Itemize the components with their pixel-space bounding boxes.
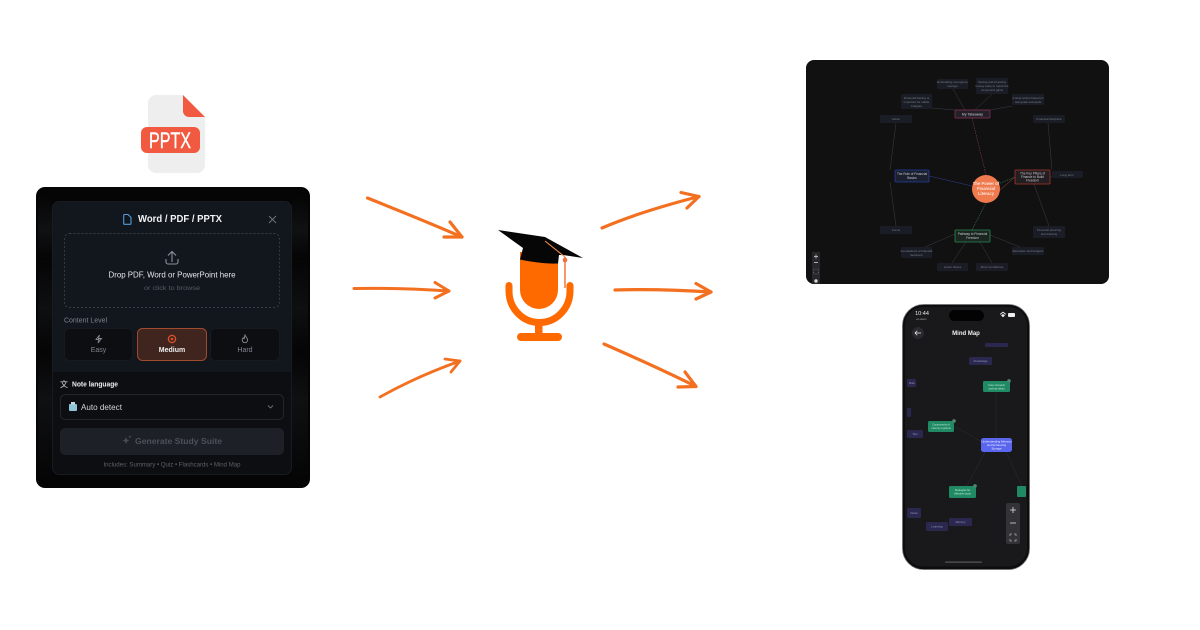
- green node labels: Strategies for: [955, 488, 970, 492]
- purple node labels: Learning: [932, 524, 943, 528]
- node: red branch: Freedom: [1026, 178, 1039, 182]
- outer node labels: [892, 80, 1074, 269]
- icon: document: [124, 214, 131, 224]
- green node labels: memory systems: [931, 426, 951, 430]
- node: green branch: Pathway to Financial: [958, 232, 987, 236]
- node: blue branch: The Role of Financial: [897, 172, 927, 176]
- green node labels: Core concepts: [988, 383, 1006, 387]
- outer node labels: savings: [947, 84, 958, 88]
- status bar: [915, 311, 1015, 321]
- green node badges: [952, 379, 1011, 488]
- outer node labels: Long term: [1060, 173, 1074, 177]
- outer node labels: Focus: [892, 228, 901, 232]
- green node labels: and key ideas: [988, 386, 1005, 390]
- purple node labels: Role: [909, 381, 915, 385]
- outer node labels: A clear action based on: [1012, 96, 1044, 100]
- node: central topic: The Power of: [973, 181, 1000, 186]
- icon: PPTX file: [141, 95, 205, 173]
- outer node labels: budgets: [911, 104, 922, 108]
- panel: drop zone: [64, 234, 280, 308]
- button: generate study suite: Generate Study Suite: [135, 436, 222, 446]
- button: easy: [64, 328, 132, 360]
- node: my takeaway: [955, 110, 990, 118]
- green node labels: Components of: [932, 422, 950, 426]
- node: green branch: Freedom: [966, 236, 979, 240]
- icon: translate: 文: [60, 379, 68, 389]
- node: central topic: Literacy: [978, 191, 995, 196]
- outer nodes: [880, 78, 1083, 271]
- arrow: output bottom: [604, 344, 696, 387]
- green node labels: [931, 383, 1006, 496]
- outer node labels: Saving and investing: [978, 80, 1006, 84]
- arrow: output middle: [615, 284, 711, 299]
- language select: [60, 394, 284, 420]
- purple node labels: Notes: [910, 511, 918, 515]
- outer node labels: Foundations of financial: [901, 249, 933, 253]
- mind map heading: Mind Map: [952, 331, 980, 337]
- icon: PPTX file: PPTX: [149, 128, 191, 153]
- outer node labels: Lower Stress: [944, 265, 962, 269]
- button: easy: Easy: [91, 347, 107, 354]
- icon: upload: [166, 252, 178, 264]
- central blue node: Understanding Memory: [981, 440, 1012, 444]
- back button: [912, 327, 924, 339]
- purple node labels: Tips: [912, 432, 918, 436]
- node: my takeaway: My Takeaway: [962, 112, 983, 116]
- button: medium selected: [138, 328, 206, 360]
- purple node labels: Memory: [955, 520, 966, 524]
- panel: upload dialog: [36, 187, 310, 488]
- home indicator: [945, 562, 982, 563]
- dynamic island: [949, 310, 984, 321]
- browse hint: or click to browse: [144, 285, 200, 292]
- graduation cap: [498, 230, 583, 264]
- outer node labels: Embedding emergency: [937, 80, 968, 84]
- outer node labels: and tracking: [1041, 232, 1058, 236]
- status bar: 10:44: [915, 311, 929, 317]
- node: blue branch: Basics: [907, 176, 917, 180]
- node: red branch: The Key Pillars of: [1020, 172, 1045, 176]
- outer node labels: Education and budgets: [1013, 249, 1044, 253]
- language select: Auto detect: [81, 403, 123, 412]
- outer node labels: decisions: [910, 253, 923, 257]
- outer node labels: Financial planning: [1037, 228, 1061, 232]
- microphone head: [520, 252, 558, 309]
- outer node labels: Financial literacy is: [904, 96, 930, 100]
- connectors: [890, 89, 1052, 263]
- phone: mobile mind map: [902, 304, 1030, 570]
- includes footnote: Includes: Summary • Quiz • Flashcards • Mind Map: [104, 462, 241, 468]
- purple node labels: Knowledge: [974, 359, 988, 363]
- arrow: input middle: [354, 282, 449, 298]
- outer node labels: More Confidence: [981, 265, 1004, 269]
- status bar: ◂ Latest: [916, 317, 927, 321]
- button: generate study suite: [60, 428, 284, 455]
- note language label: Note language: [72, 382, 118, 388]
- node: central topic: Financial: [977, 186, 995, 191]
- green nodes: [928, 381, 1026, 498]
- connectors: [954, 392, 1022, 486]
- node: green branch: [955, 230, 990, 242]
- content level label: Content Level: [64, 318, 107, 324]
- icon: close: [269, 216, 276, 223]
- node: central topic: [972, 175, 1000, 203]
- node: red branch: [1015, 170, 1050, 184]
- zoom controls: [1006, 503, 1020, 544]
- node: red branch: Finance to Build: [1021, 175, 1044, 179]
- arrow: input top: [368, 198, 462, 237]
- central blue node: [981, 438, 1012, 452]
- arrow: input bottom: [380, 359, 460, 397]
- purple node labels: [909, 359, 988, 528]
- outer node labels: money early to maximize: [975, 84, 1009, 88]
- button: medium selected: Medium: [159, 347, 185, 354]
- purple nodes: [907, 343, 1008, 531]
- button: hard: [210, 328, 280, 360]
- central blue node: Storage: [991, 446, 1002, 450]
- icon: graduation cap microphone: [498, 230, 583, 341]
- node: blue branch: [895, 170, 929, 182]
- microphone stand: [509, 286, 570, 323]
- outer node labels: important for stable: [904, 100, 930, 104]
- outer node labels: Action: [892, 117, 900, 121]
- zoom controls: [812, 252, 820, 284]
- panel: desktop mind map: [806, 60, 1109, 284]
- central blue node: and Enhancing: [987, 443, 1007, 447]
- outer node labels: Financial discipline: [1036, 117, 1062, 121]
- arrow: output top: [602, 192, 699, 228]
- dialog title: Word / PDF / PPTX: [138, 213, 222, 225]
- outer node labels: compound gains: [981, 88, 1004, 92]
- outer node labels: real goals succeeds: [1015, 100, 1042, 104]
- green node labels: effective study: [954, 492, 971, 496]
- button: hard: Hard: [237, 347, 253, 354]
- drop instruction: Drop PDF, Word or PowerPoint here: [108, 270, 236, 280]
